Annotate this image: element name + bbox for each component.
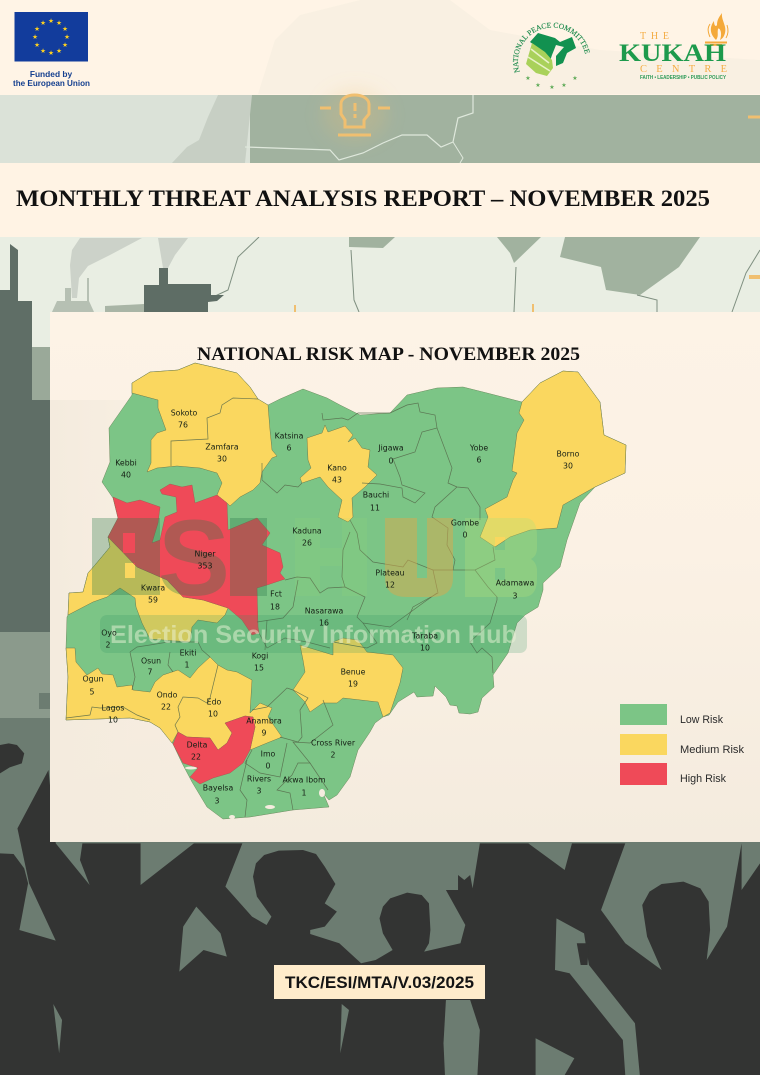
state labels: 2	[331, 750, 336, 760]
state labels: Niger	[195, 550, 216, 558]
state labels: 3	[215, 796, 220, 806]
state labels: Anambra	[246, 716, 282, 726]
EU logo: the European Union	[13, 78, 90, 88]
low risk states base	[66, 363, 626, 819]
Kukah Centre logo: CENTRE	[640, 64, 727, 75]
coastal creeks	[185, 766, 325, 819]
watermark letters ESI: S	[158, 497, 230, 618]
state labels: Kogi	[252, 652, 268, 660]
state labels: 9	[262, 728, 267, 738]
EU logo: ★	[64, 33, 70, 41]
National Peace Committee logo: ★	[572, 75, 578, 82]
Kukah Centre logo: FAITH • LEADERSHIP • PUBLIC POLICY	[640, 75, 727, 81]
watermark letters ESI	[92, 497, 267, 618]
state labels: 18	[270, 602, 280, 612]
legend: Medium Risk	[680, 744, 744, 756]
watermark letter U	[385, 518, 453, 597]
state labels: Yobe	[469, 444, 488, 452]
state labels	[83, 408, 580, 806]
medium risk: Benue	[293, 638, 403, 717]
state labels: 59	[148, 596, 158, 604]
state labels: Fct	[270, 590, 282, 598]
panel: risk map	[50, 312, 760, 842]
state labels: 10	[208, 710, 218, 718]
state labels: 7	[148, 668, 153, 676]
icon: warning bulb in band	[320, 95, 760, 135]
state labels: Kaduna	[292, 526, 322, 536]
state labels: 11	[370, 504, 380, 512]
state labels: 22	[161, 702, 171, 712]
state boundaries	[66, 398, 497, 817]
Kukah Centre logo	[619, 13, 728, 81]
Kukah Centre logo: KUKAH	[619, 40, 727, 67]
watermark banner: Election Security Information Hub	[110, 621, 517, 649]
state labels: 6	[287, 444, 292, 452]
medium risk: Ogun, Lagos, Ondo, Edo, Anambra	[66, 648, 282, 750]
watermark: ESI HUB	[92, 497, 537, 618]
medium risk: Sokoto and Zamfara	[132, 363, 277, 506]
state labels: Benue	[341, 668, 366, 676]
EU logo: ★	[48, 17, 54, 25]
background: crowd silhouette	[0, 718, 760, 1075]
state labels: Osun	[141, 656, 161, 666]
EU logo: ★	[32, 33, 38, 41]
legend	[620, 704, 744, 785]
EU logo: ★	[56, 19, 62, 27]
high risk: Niger	[108, 484, 285, 635]
EU logo: ★	[40, 19, 46, 27]
state labels: Kwara	[141, 584, 165, 592]
state labels: Ondo	[157, 690, 178, 700]
EU logo: ★	[34, 25, 40, 33]
state labels: Kano	[327, 464, 347, 472]
state labels: 15	[254, 664, 264, 672]
header faint map shape	[258, 0, 760, 94]
National Peace Committee logo: NATIONAL PEACE COMMITTEE	[512, 22, 590, 74]
state labels: 353	[198, 562, 212, 570]
state labels: 30	[563, 462, 573, 470]
state labels: 3	[257, 786, 262, 796]
National Peace Committee logo: ★	[525, 75, 531, 82]
state labels: 16	[319, 618, 329, 628]
EU logo: ★	[40, 47, 46, 55]
state labels: 6	[477, 456, 482, 464]
state labels: Plateau	[375, 568, 405, 578]
title: MONTHLY THREAT ANALYSIS REPORT – NOVEMBER 2025	[16, 186, 710, 211]
EU logo: ★	[48, 49, 54, 57]
state labels: Taraba	[411, 632, 438, 640]
state labels: 5	[90, 688, 95, 696]
state labels: 1	[302, 788, 307, 798]
state labels: Akwa Ibom	[282, 776, 326, 784]
map: Nigeria risk by state	[66, 363, 626, 819]
state labels: Lagos	[102, 704, 124, 712]
state labels: Bayelsa	[203, 784, 233, 792]
state labels: Sokoto	[171, 408, 198, 418]
state labels: Zamfara	[205, 442, 239, 452]
state labels: 3	[513, 592, 518, 600]
state labels: 26	[302, 538, 312, 548]
state labels: Ekiti	[180, 648, 196, 658]
state labels: 76	[178, 420, 188, 430]
state labels: Nasarawa	[305, 606, 344, 616]
state labels: 0	[389, 456, 394, 466]
EU logo: ★	[56, 47, 62, 55]
state labels: 1	[185, 660, 190, 670]
state labels: Borno	[557, 450, 580, 458]
background band: map strip	[0, 89, 760, 163]
watermark banner	[100, 615, 527, 653]
state labels: Gombe	[451, 518, 479, 528]
cream band behind title	[0, 163, 760, 237]
state labels: 12	[385, 580, 395, 590]
National Peace Committee logo: ★	[561, 82, 567, 89]
state labels: 10	[108, 716, 118, 724]
state labels: Ogun	[83, 674, 104, 684]
medium risk: Kwara	[68, 537, 228, 642]
legend: Low Risk	[680, 714, 723, 726]
state labels: Oyo	[101, 628, 117, 638]
state labels: 22	[191, 752, 201, 762]
state labels: 0	[463, 530, 468, 540]
state labels: Adamawa	[496, 578, 534, 588]
state labels: Kebbi	[115, 458, 137, 468]
background band: factories and map	[0, 237, 760, 718]
state labels: Imo	[261, 750, 276, 758]
reference code box: TKC/ESI/MTA/V.03/2025	[285, 973, 474, 992]
state labels: 30	[217, 454, 227, 464]
watermark letter B	[465, 518, 537, 597]
reference code box	[274, 965, 485, 999]
state labels: 2	[106, 640, 111, 650]
state labels: Rivers	[247, 774, 271, 784]
map heading: NATIONAL RISK MAP - NOVEMBER 2025	[197, 344, 580, 365]
watermark letter H	[295, 518, 367, 596]
EU logo: ★	[62, 25, 68, 33]
state labels: Bauchi	[363, 490, 389, 500]
EU logo: ★	[34, 41, 40, 49]
state labels: Jigawa	[377, 444, 404, 452]
medium risk: Borno	[480, 371, 626, 547]
National Peace Committee logo: ★	[549, 84, 555, 91]
state labels: 43	[332, 476, 342, 484]
Kukah Centre logo: THE	[640, 31, 669, 42]
EU logo: ★	[62, 41, 68, 49]
legend: High Risk	[680, 773, 726, 785]
state labels: Edo	[207, 698, 222, 706]
state labels: Katsina	[275, 432, 304, 440]
state labels: 10	[420, 644, 430, 652]
EU logo	[13, 12, 90, 88]
medium risk: Kano	[300, 425, 377, 522]
state labels: Cross River	[311, 738, 356, 748]
EU logo: Funded by	[30, 69, 73, 79]
state labels: Delta	[187, 740, 208, 750]
high risk: Delta	[173, 716, 255, 784]
state labels: 0	[266, 762, 271, 770]
state labels: 40	[121, 470, 131, 480]
state labels: 19	[348, 680, 358, 688]
National Peace Committee logo: ★	[535, 82, 541, 89]
